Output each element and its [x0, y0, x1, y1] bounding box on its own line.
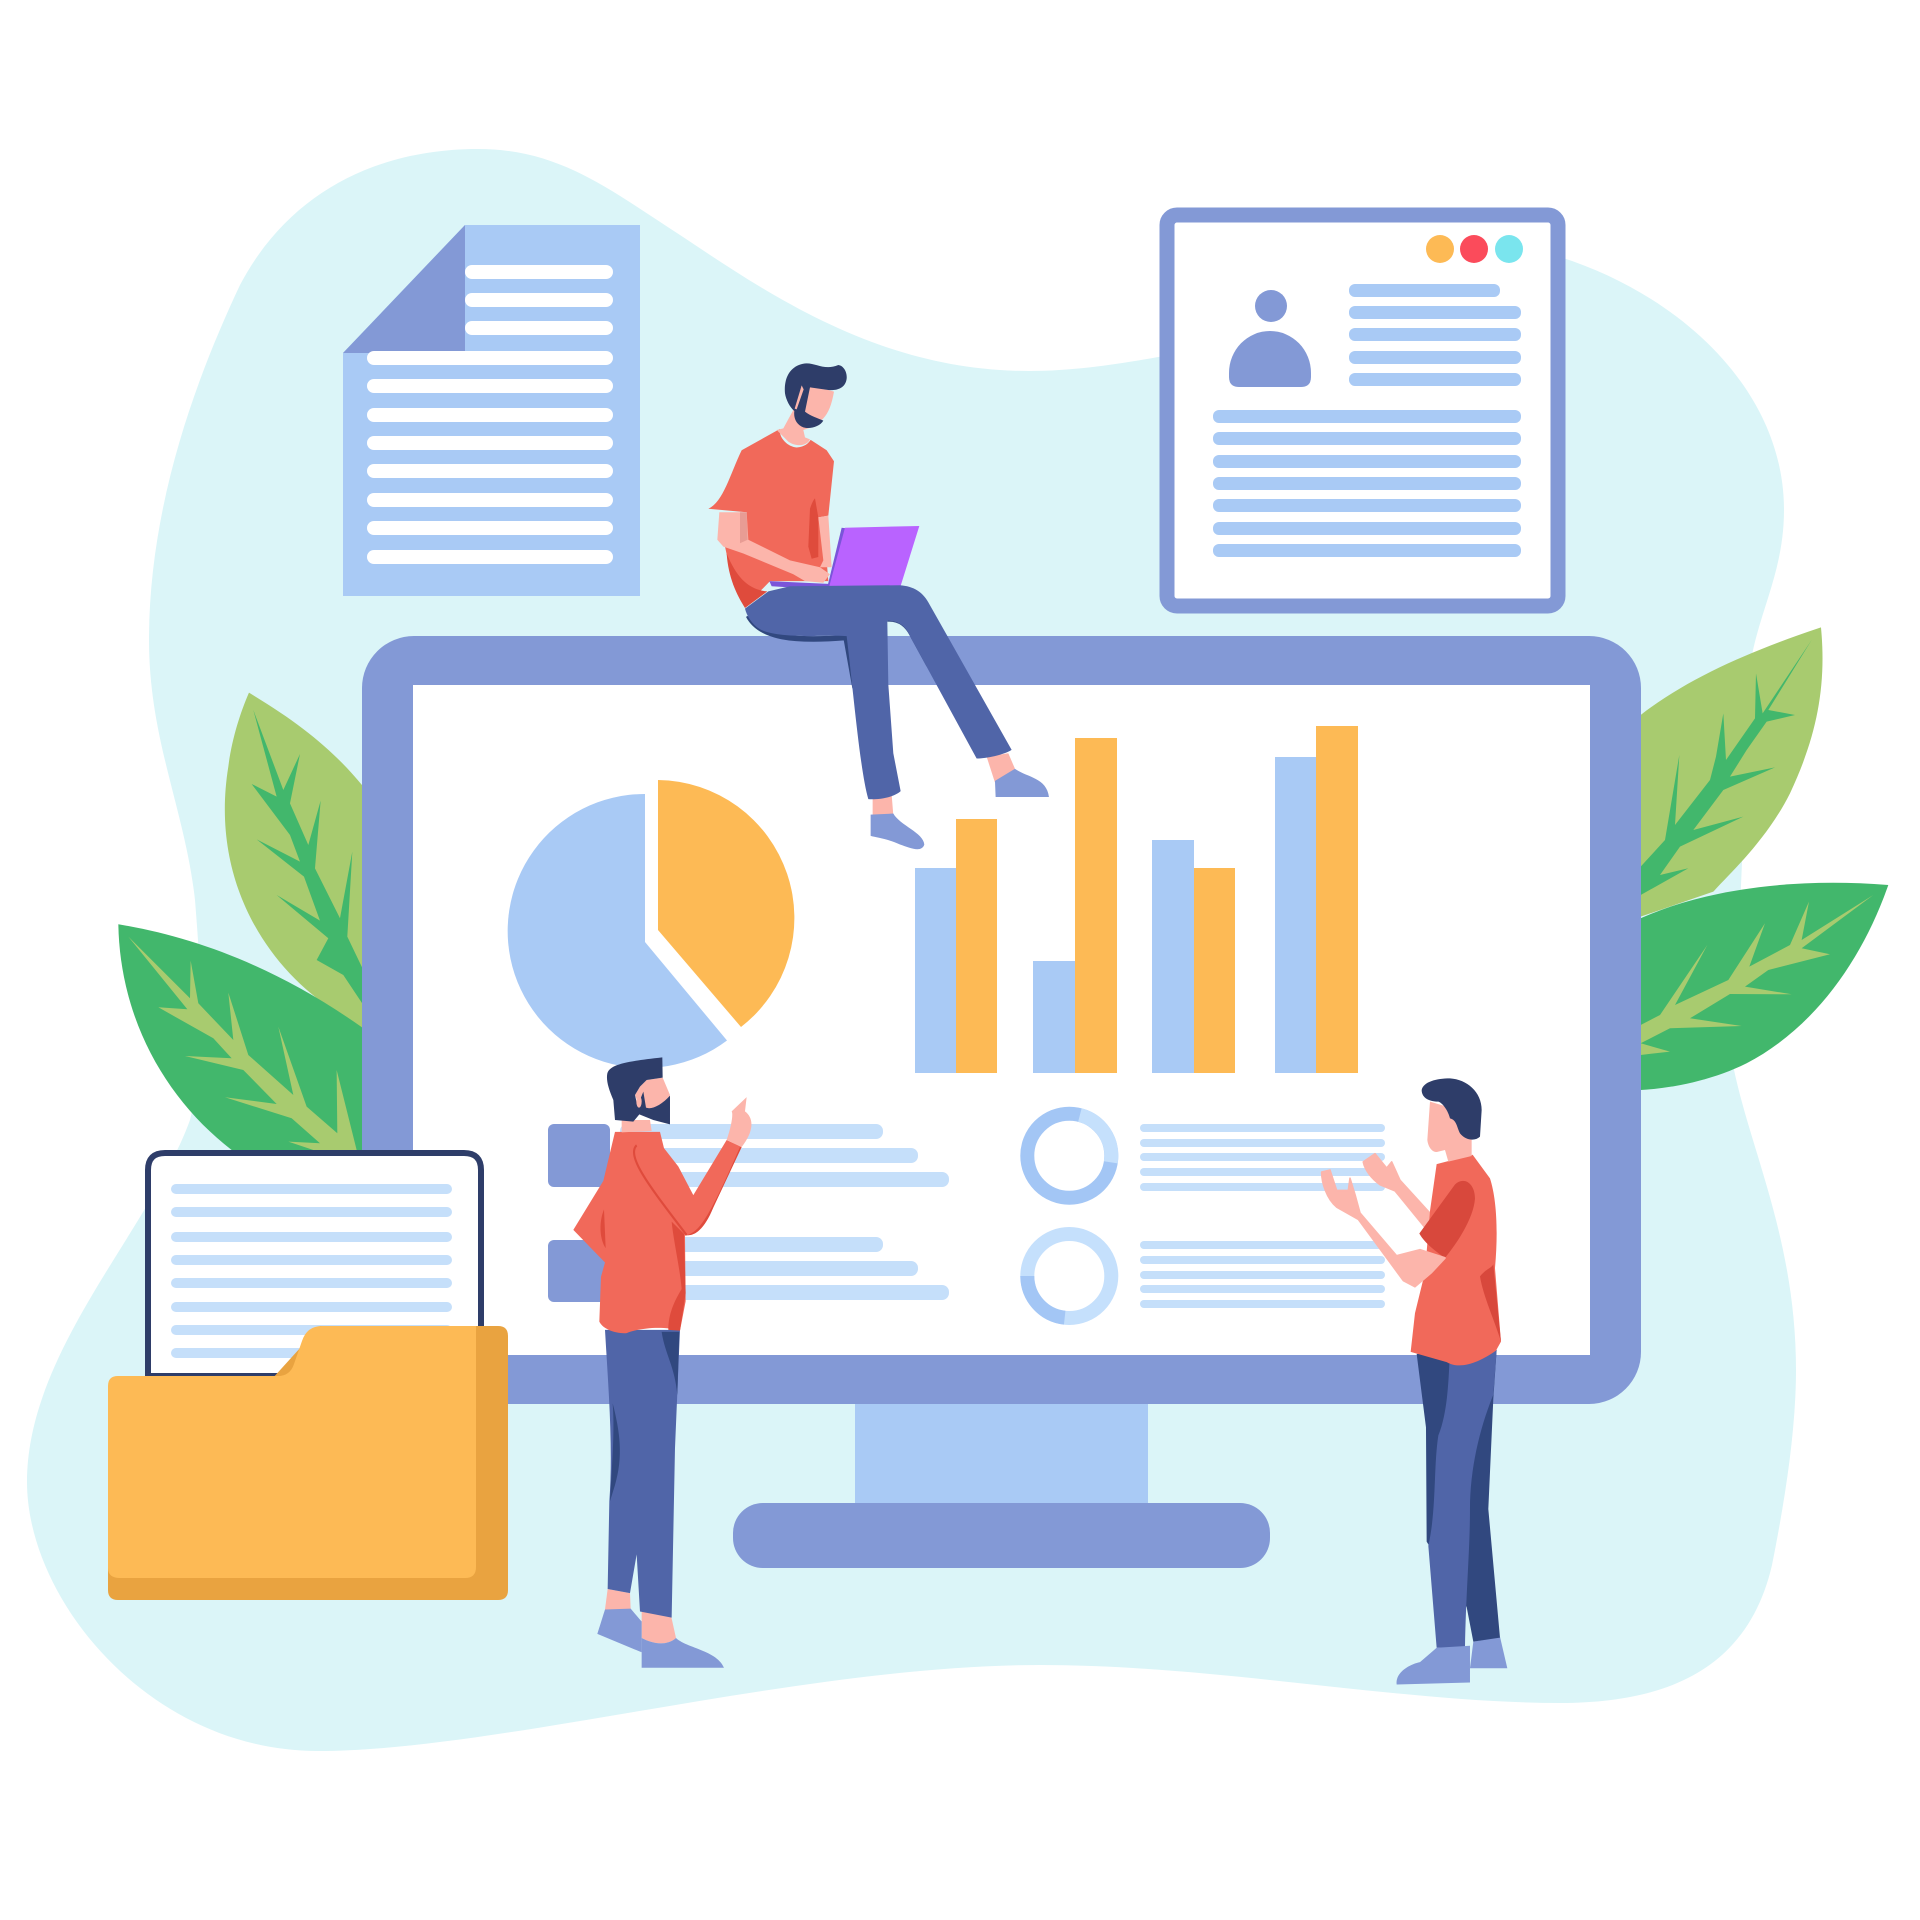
pointing man shirt [573, 1132, 742, 1333]
gesturing man back arm [1363, 1154, 1432, 1227]
pie orange slice [658, 780, 794, 1027]
folder back [108, 1326, 508, 1600]
pie blue slice [508, 794, 727, 1068]
gesturing man front arm [1322, 1170, 1445, 1287]
monitor screen [413, 685, 1590, 1355]
document page [343, 225, 640, 596]
seated man body [708, 429, 1049, 849]
window frame [1167, 215, 1558, 606]
ring charts [1027, 1114, 1111, 1318]
seated man arms [717, 512, 832, 583]
avatar icon [1229, 290, 1311, 387]
right leaves [1641, 627, 1888, 1090]
gesturing man shirt [1411, 1155, 1501, 1365]
pointing man head [607, 1057, 670, 1132]
folder front [108, 1326, 476, 1578]
monitor [362, 636, 1641, 1568]
clipboard paper [148, 1153, 481, 1376]
pointing man hand [727, 1097, 751, 1147]
bar chart [915, 726, 1358, 1073]
profile window [1167, 215, 1558, 606]
monitor frame [362, 636, 1641, 1404]
monitor stand [855, 1400, 1148, 1510]
pie chart [508, 780, 794, 1068]
gesturing man head [1422, 1078, 1482, 1162]
left text lines [620, 1124, 949, 1300]
laptop [769, 526, 919, 590]
pointing man body [573, 1097, 751, 1668]
seated man trousers [745, 585, 1012, 799]
pointing man legs [597, 1330, 724, 1668]
document lines [367, 265, 613, 564]
seated man torso [708, 429, 834, 608]
window buttons [1426, 235, 1523, 263]
person: standing man gesturing [1322, 1078, 1507, 1685]
seated man feet [871, 753, 1049, 849]
left leaves [118, 693, 363, 1150]
monitor base [733, 1503, 1270, 1568]
gesturing man trousers [1397, 1350, 1507, 1685]
folder [108, 1326, 508, 1600]
background blob [27, 149, 1796, 1751]
document fold [343, 225, 465, 353]
person: sitting man with laptop [708, 363, 1049, 849]
list icons [548, 1124, 610, 1302]
document [343, 225, 640, 596]
gesturing man body [1322, 1154, 1507, 1685]
person: standing man pointing [573, 1057, 751, 1668]
right text lines [1140, 1124, 1385, 1308]
window text lines [1213, 284, 1521, 557]
seated man head [777, 363, 847, 445]
